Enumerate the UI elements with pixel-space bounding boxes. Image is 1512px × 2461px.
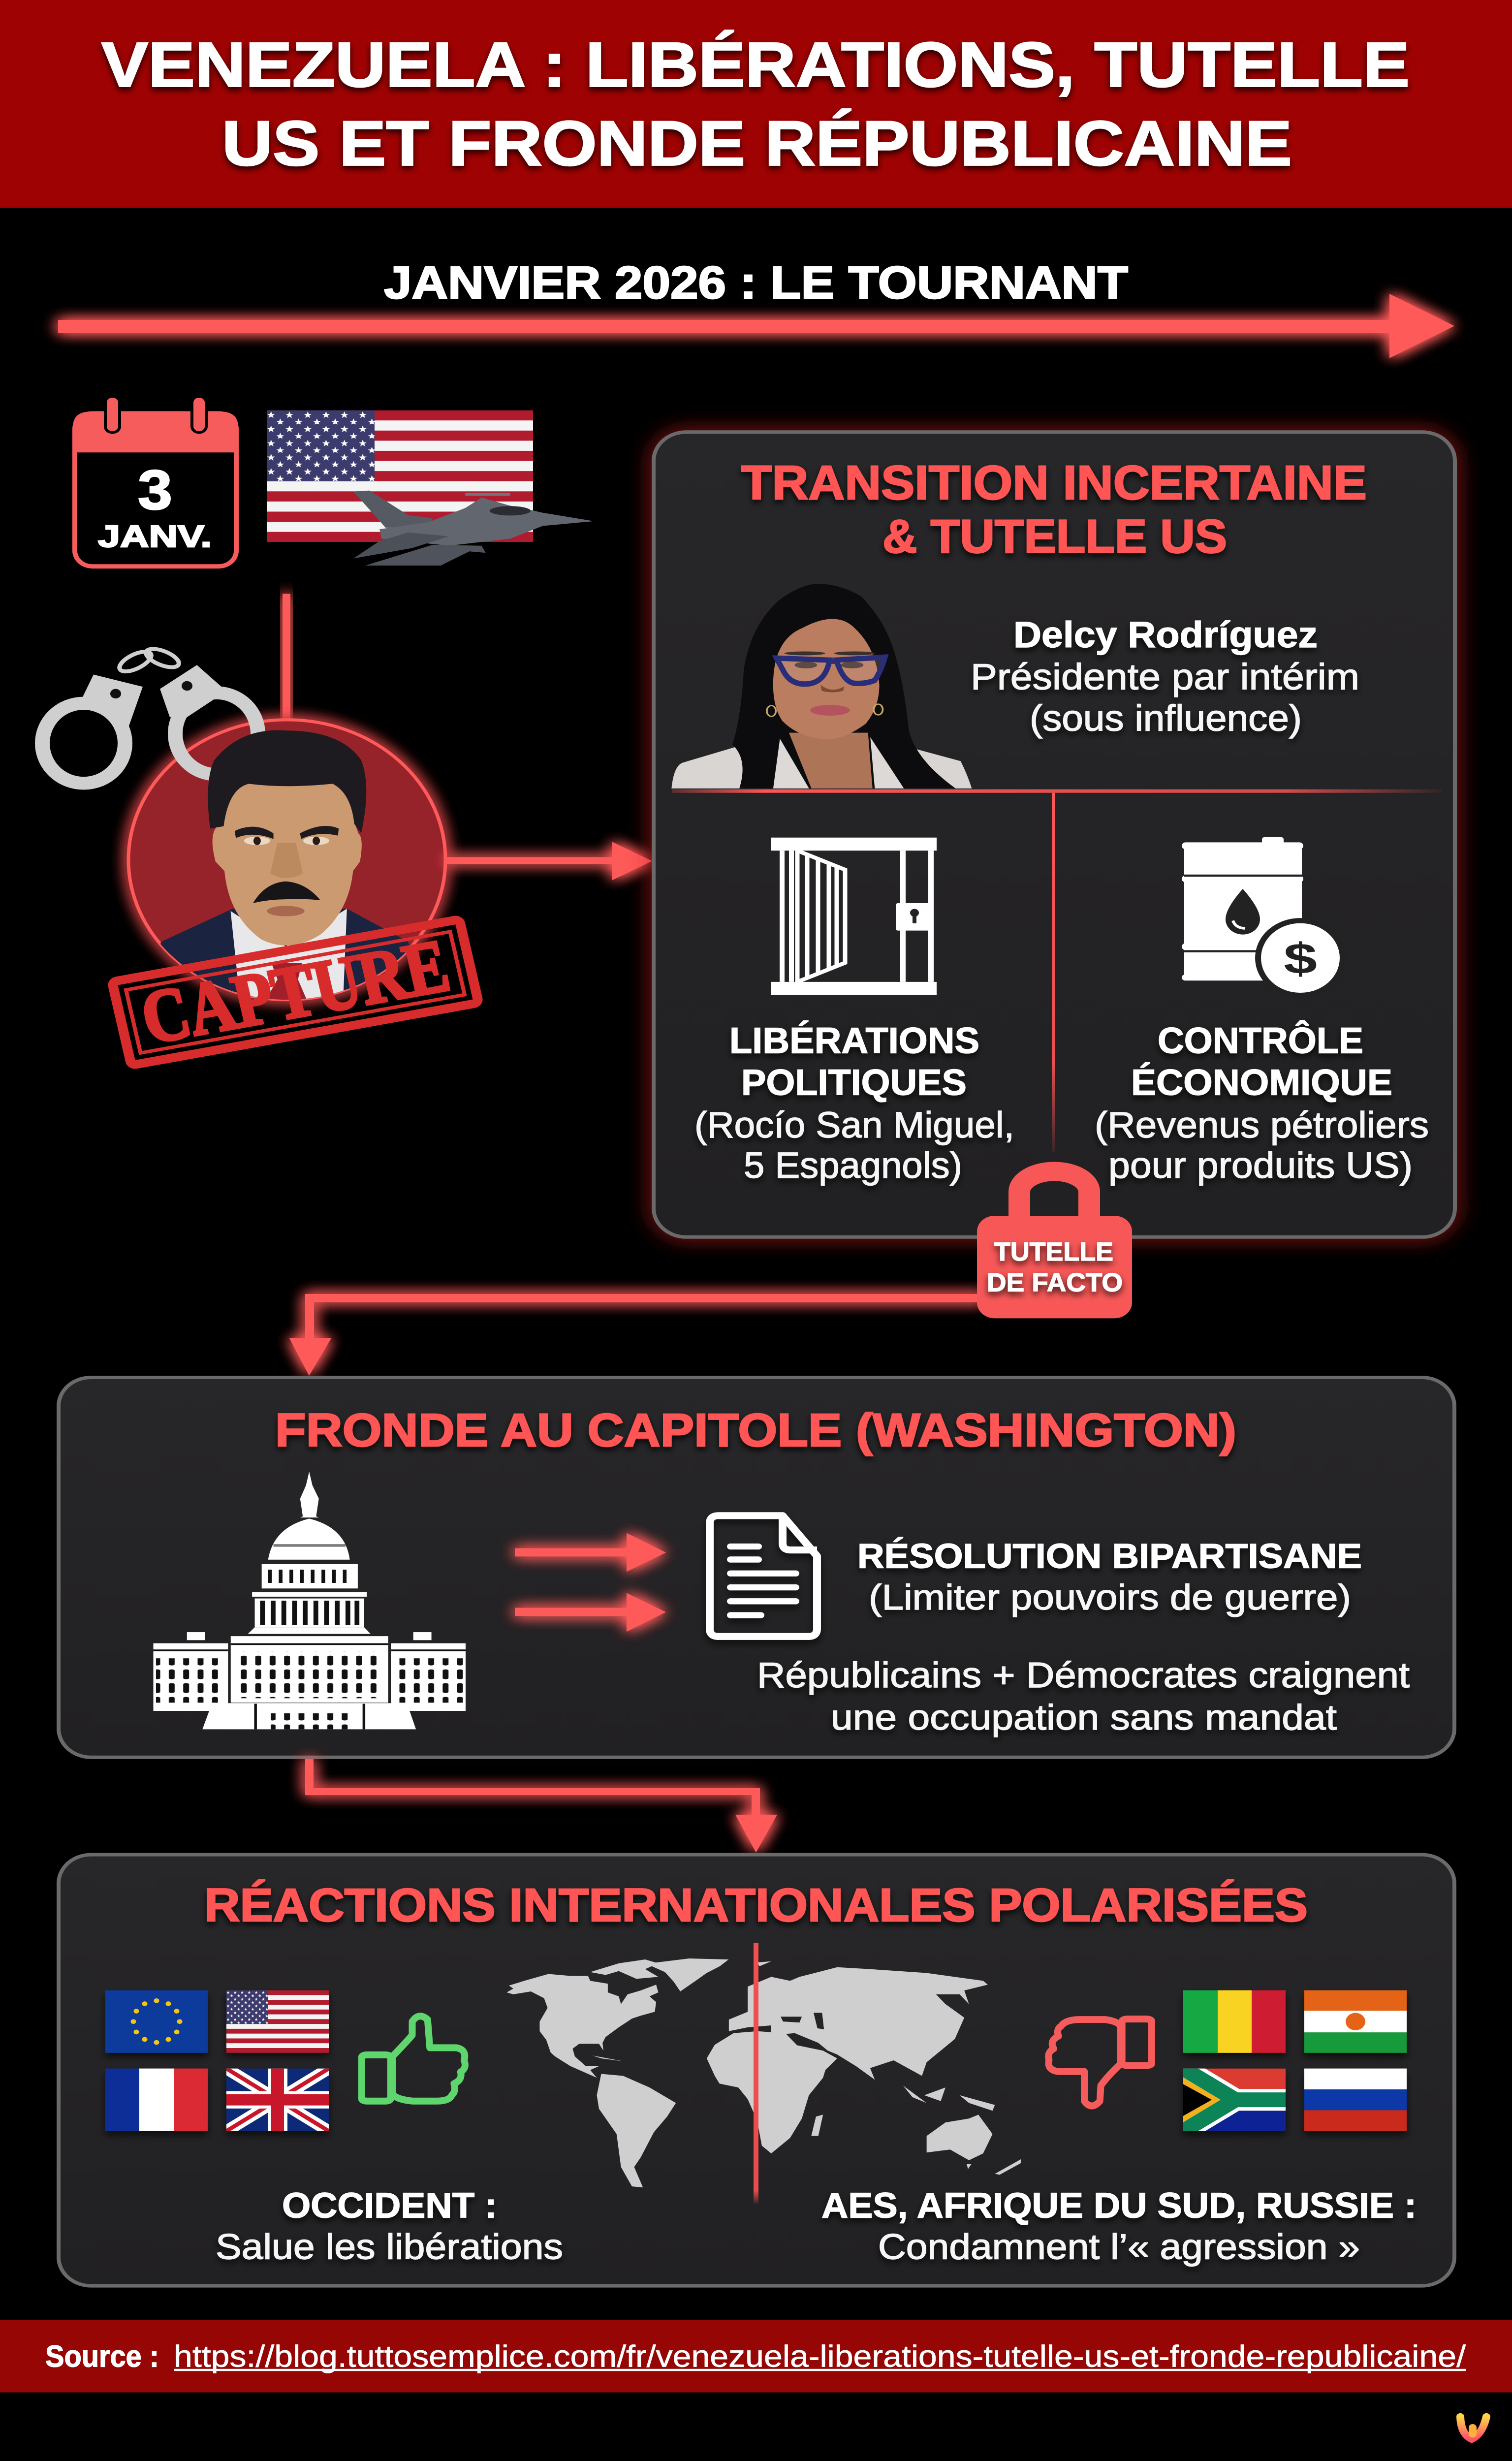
text: contrôle économique: CONTRÔLE — [1158, 1020, 1363, 1061]
text: AES, Afrique du Sud, Russie: Condamnent l’« agression » — [878, 2227, 1360, 2267]
timeline heading: JANVIER 2026 : LE TOURNANT — [384, 257, 1128, 308]
header banner — [0, 0, 1512, 208]
flag: United States small — [226, 1990, 329, 2053]
text: libérations politiques: (Rocío San Miguel, — [694, 1104, 1014, 1145]
source text: https://blog.tuttosemplice.com/fr/venezuela-liberations-tutelle-us-et-fronde-republicaine/ — [174, 2339, 1466, 2373]
flag: Mali — [1183, 1990, 1286, 2053]
icon: oil barrel with dollar: $ — [1284, 935, 1317, 983]
heading: fronde au capitole: FRONDE AU CAPITOLE (WASHINGTON) — [275, 1405, 1236, 1456]
icon: open prison door — [771, 838, 937, 995]
icon: handcuffs — [42, 645, 258, 783]
source text: Source : — [45, 2339, 159, 2373]
icon: thumbs down — [1048, 2019, 1152, 2106]
icon: calendar 3 janv.: JANV. — [98, 519, 212, 553]
text: résolution bipartisane: RÉSOLUTION BIPARTISANE — [857, 1537, 1362, 1575]
heading: transition incertaine — [741, 456, 1367, 563]
text: Delcy Rodríguez: Delcy Rodríguez — [1013, 614, 1318, 655]
text: résolution bipartisane — [857, 1537, 1362, 1617]
text: contrôle économique: pour produits US) — [1108, 1145, 1413, 1186]
stamp: capture — [112, 919, 478, 1065]
text: résolution bipartisane: (Limiter pouvoirs de guerre) — [869, 1578, 1351, 1617]
text: occident — [216, 2186, 563, 2267]
icon: US Capitol — [153, 1472, 466, 1729]
arrow: capture to transition — [446, 842, 652, 880]
connector: capitole to réactions — [305, 1759, 777, 1853]
footer banner — [0, 2320, 1512, 2392]
text: contrôle économique: (Revenus pétroliers — [1095, 1104, 1429, 1145]
text: AES, Afrique du Sud, Russie: AES, AFRIQUE DU SUD, RUSSIE : — [821, 2186, 1417, 2225]
heading: transition incertaine: TRANSITION INCERTAINE — [741, 456, 1367, 509]
flag: South Africa — [1183, 2069, 1286, 2131]
heading: réactions internationales: RÉACTIONS INTERNATIONALES POLARISÉES — [204, 1880, 1308, 1931]
text: républicains et démocrates — [757, 1656, 1410, 1737]
panel: fronde au capitole — [59, 1377, 1454, 1757]
title: US ET FRONDE RÉPUBLICAINE — [222, 108, 1292, 179]
flag: France — [105, 2069, 208, 2131]
logo — [1460, 2417, 1486, 2439]
text: contrôle économique: ÉCONOMIQUE — [1131, 1062, 1392, 1103]
text: libérations politiques: POLITIQUES — [741, 1062, 967, 1103]
text: républicains et démocrates: une occupation sans mandat — [831, 1698, 1337, 1737]
heading: transition incertaine: & TUTELLE US — [882, 510, 1227, 563]
arrows: capitol to resolution — [515, 1533, 666, 1632]
text: libérations politiques — [694, 1020, 1014, 1186]
flag: United States — [267, 410, 533, 542]
icon: fighter jet — [353, 491, 594, 566]
connector: tutelle to fronde — [289, 1294, 984, 1376]
illustration: Delcy Rodríguez portrait — [671, 584, 972, 789]
text: libérations politiques: 5 Espagnols) — [744, 1145, 962, 1186]
icon: oil barrel with dollar — [1182, 837, 1346, 998]
icon: padlock tutelle de facto: DE FACTO — [987, 1268, 1123, 1297]
portrait background circle — [128, 720, 445, 1000]
icon: padlock tutelle de facto: TUTELLE — [994, 1237, 1113, 1266]
flag: United Kingdom — [226, 2069, 329, 2131]
arrow: timeline — [58, 294, 1454, 358]
icon: document — [710, 1515, 817, 1637]
title: VENEZUELA : LIBÉRATIONS, TUTELLE — [101, 30, 1410, 100]
map: world — [498, 1943, 1021, 2204]
capture portrait group — [42, 645, 478, 1065]
text: occident: OCCIDENT : — [282, 2186, 497, 2225]
text: libérations politiques: LIBÉRATIONS — [729, 1020, 979, 1061]
text: occident: Salue les libérations — [216, 2227, 563, 2267]
icon: calendar 3 janv.: 3 — [138, 459, 172, 521]
text: Delcy Rodríguez: (sous influence) — [1030, 697, 1302, 738]
flag: Russia — [1304, 2069, 1407, 2131]
text: Delcy Rodríguez: Présidente par intérim — [971, 656, 1359, 697]
title — [101, 30, 1410, 179]
flag: Niger — [1304, 1990, 1407, 2053]
text: AES, Afrique du Sud, Russie — [821, 2186, 1417, 2267]
icon: thumbs up — [362, 2016, 465, 2101]
text: Delcy Rodríguez — [971, 614, 1359, 738]
connector: date to capture — [283, 594, 290, 721]
flag: European Union — [105, 1990, 208, 2053]
panel: réactions internationales — [59, 1855, 1454, 2286]
panel: transition incertaine — [652, 430, 1457, 1239]
stamp: capture: CAPTURE — [134, 924, 456, 1060]
icon: calendar 3 janv. — [73, 396, 238, 567]
text: républicains et démocrates: Républicains + Démocrates craignent — [757, 1656, 1410, 1695]
illustration: Maduro portrait — [160, 730, 410, 1000]
text: contrôle économique — [1095, 1020, 1429, 1186]
icon: padlock tutelle de facto — [977, 1171, 1132, 1318]
